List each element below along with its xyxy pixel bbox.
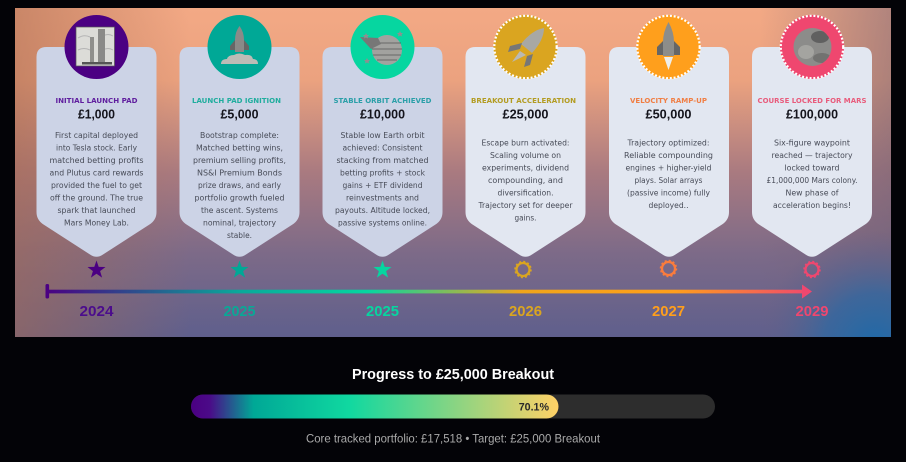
icon: tilted rocket badge	[494, 15, 558, 79]
icon: gear 2029	[804, 262, 820, 278]
year 2026: 2026	[509, 304, 542, 320]
text block: description: locked toward	[784, 163, 840, 172]
icon: rocket lifting off badge	[208, 15, 272, 79]
text block: description: nominal, trajectory	[203, 218, 277, 228]
text block: description: the ascent. Systems	[201, 206, 278, 215]
progress bar	[191, 394, 715, 418]
year 2029: 2029	[796, 304, 828, 320]
amount: £100,000: £100,000	[786, 108, 838, 122]
text block: description: experiments, dividend	[482, 163, 569, 172]
arrow: timeline	[46, 284, 812, 298]
panel: stage 4 breakout acceleration	[466, 15, 586, 257]
text block: description: acceleration begins!	[773, 201, 851, 210]
amount: £10,000: £10,000	[360, 108, 405, 122]
text block: description: payouts. Altitude locked,	[335, 206, 430, 215]
icon: launch tower badge	[64, 15, 128, 79]
heading: course locked for mars: COURSE LOCKED FOR MARS	[758, 97, 866, 105]
text block: description: passive systems online.	[338, 218, 427, 228]
text block: description	[50, 131, 144, 228]
panel: stage 2 launch pad ignition	[180, 15, 300, 257]
panel: stage 6 course locked for mars	[752, 15, 872, 257]
text block: description: stacking from matched	[336, 156, 429, 165]
text block: description	[193, 131, 286, 240]
heading: launch pad ignition: LAUNCH PAD IGNITION	[192, 97, 281, 105]
text block: description: off the ground. The true	[50, 194, 143, 202]
text block: description: betting profits + stock	[340, 168, 426, 178]
text block: description: stable.	[227, 231, 252, 240]
amount: £50,000: £50,000	[646, 108, 692, 122]
text block: description: portfolio growth fueled	[194, 194, 285, 202]
year 2025: 2025	[224, 304, 256, 320]
text block: description: Scaling volume on	[490, 151, 561, 160]
progress value: 70.1%	[519, 402, 549, 414]
heading: initial launch pad: INITIAL LAUNCH PAD	[56, 97, 138, 105]
icon: gear 2026	[515, 262, 531, 278]
text block: description: achieved: Consistent	[342, 144, 423, 152]
text block: description: gains.	[514, 213, 536, 222]
text block: description: First capital deployed	[55, 131, 138, 140]
text block: description: compounding, and	[488, 176, 563, 185]
text block: description	[477, 138, 573, 222]
text block: description: Stable low Earth orbit	[340, 131, 425, 140]
text block: description: Mars Money Lab.	[64, 218, 129, 228]
text block: description: reached — trajectory	[772, 151, 853, 160]
text block: description: premium selling profits,	[193, 156, 286, 165]
text block: description: spark that launched	[58, 206, 136, 215]
panel: roadmap background	[15, 8, 891, 337]
amount: £1,000: £1,000	[78, 108, 115, 122]
text block: description: Matched betting wins,	[196, 144, 283, 152]
years row	[80, 304, 828, 320]
year 2024: 2024	[80, 304, 114, 320]
heading: progress to breakout: Progress to £25,000 Breakout	[352, 367, 554, 383]
text block: description: Trajectory optimized:	[626, 138, 710, 147]
icon: gear 2027	[660, 260, 676, 276]
text block: description	[624, 138, 713, 210]
icon: upright rocket badge	[636, 15, 700, 79]
text block: description: Reliable compounding	[624, 151, 713, 160]
text block: description	[766, 138, 858, 210]
text block: description: NS&I Premium Bonds	[197, 168, 282, 178]
text block: description	[335, 131, 430, 228]
heading: breakout acceleration: BREAKOUT ACCELERATION	[471, 97, 576, 105]
text block: description: £1,000,000 Mars colony.	[766, 176, 858, 185]
text block: description: New phase of	[786, 188, 839, 197]
panel: stage 3 stable orbit achieved	[322, 15, 442, 257]
icon: star 2025 second	[374, 260, 392, 278]
heading: velocity ramp-up: VELOCITY RAMP-UP	[630, 97, 707, 105]
year 2027: 2027	[652, 304, 685, 320]
text block: description: Trajectory set for deeper	[477, 201, 573, 210]
text block: description: gains + ETF dividend	[342, 181, 423, 190]
text block: description: (passive income) fully	[627, 188, 711, 197]
text block: description: engines + higher-yield	[626, 163, 712, 172]
text block: description: deployed..	[648, 201, 688, 210]
icon: star 2024	[88, 260, 106, 278]
text block: description: Escape burn activated:	[482, 138, 570, 147]
panel: stage 5 velocity ramp-up	[609, 15, 729, 257]
amount: £5,000: £5,000	[220, 108, 258, 122]
text block: description: diversification.	[498, 188, 554, 197]
text block: description: and Plutus card rewards	[50, 168, 144, 178]
icon: mars badge	[780, 15, 844, 79]
icon: planet and rocket badge	[350, 15, 414, 79]
amount: £25,000: £25,000	[502, 108, 548, 122]
text block: description: into Tesla stock. Early	[56, 144, 138, 152]
caption: portfolio and target: Core tracked portfolio: £17,518 • Target: £25,000 Breakout	[306, 432, 601, 446]
text block: description: reinvestments and	[346, 194, 419, 202]
text block: description: matched betting profits	[50, 156, 144, 165]
text block: description: plays. Solar arrays	[634, 176, 703, 185]
text block: description: provided the fuel to get	[51, 181, 142, 190]
text block: description: Six-figure waypoint	[774, 138, 850, 147]
year 2025 second: 2025	[366, 304, 399, 320]
text block: description: prize draws, and early	[198, 181, 282, 190]
heading: stable orbit achieved: STABLE ORBIT ACHIEVED	[334, 97, 432, 105]
icon: star 2025	[230, 260, 248, 278]
panel: stage 1 initial launch pad	[36, 15, 156, 257]
text block: description: Bootstrap complete:	[200, 131, 279, 140]
